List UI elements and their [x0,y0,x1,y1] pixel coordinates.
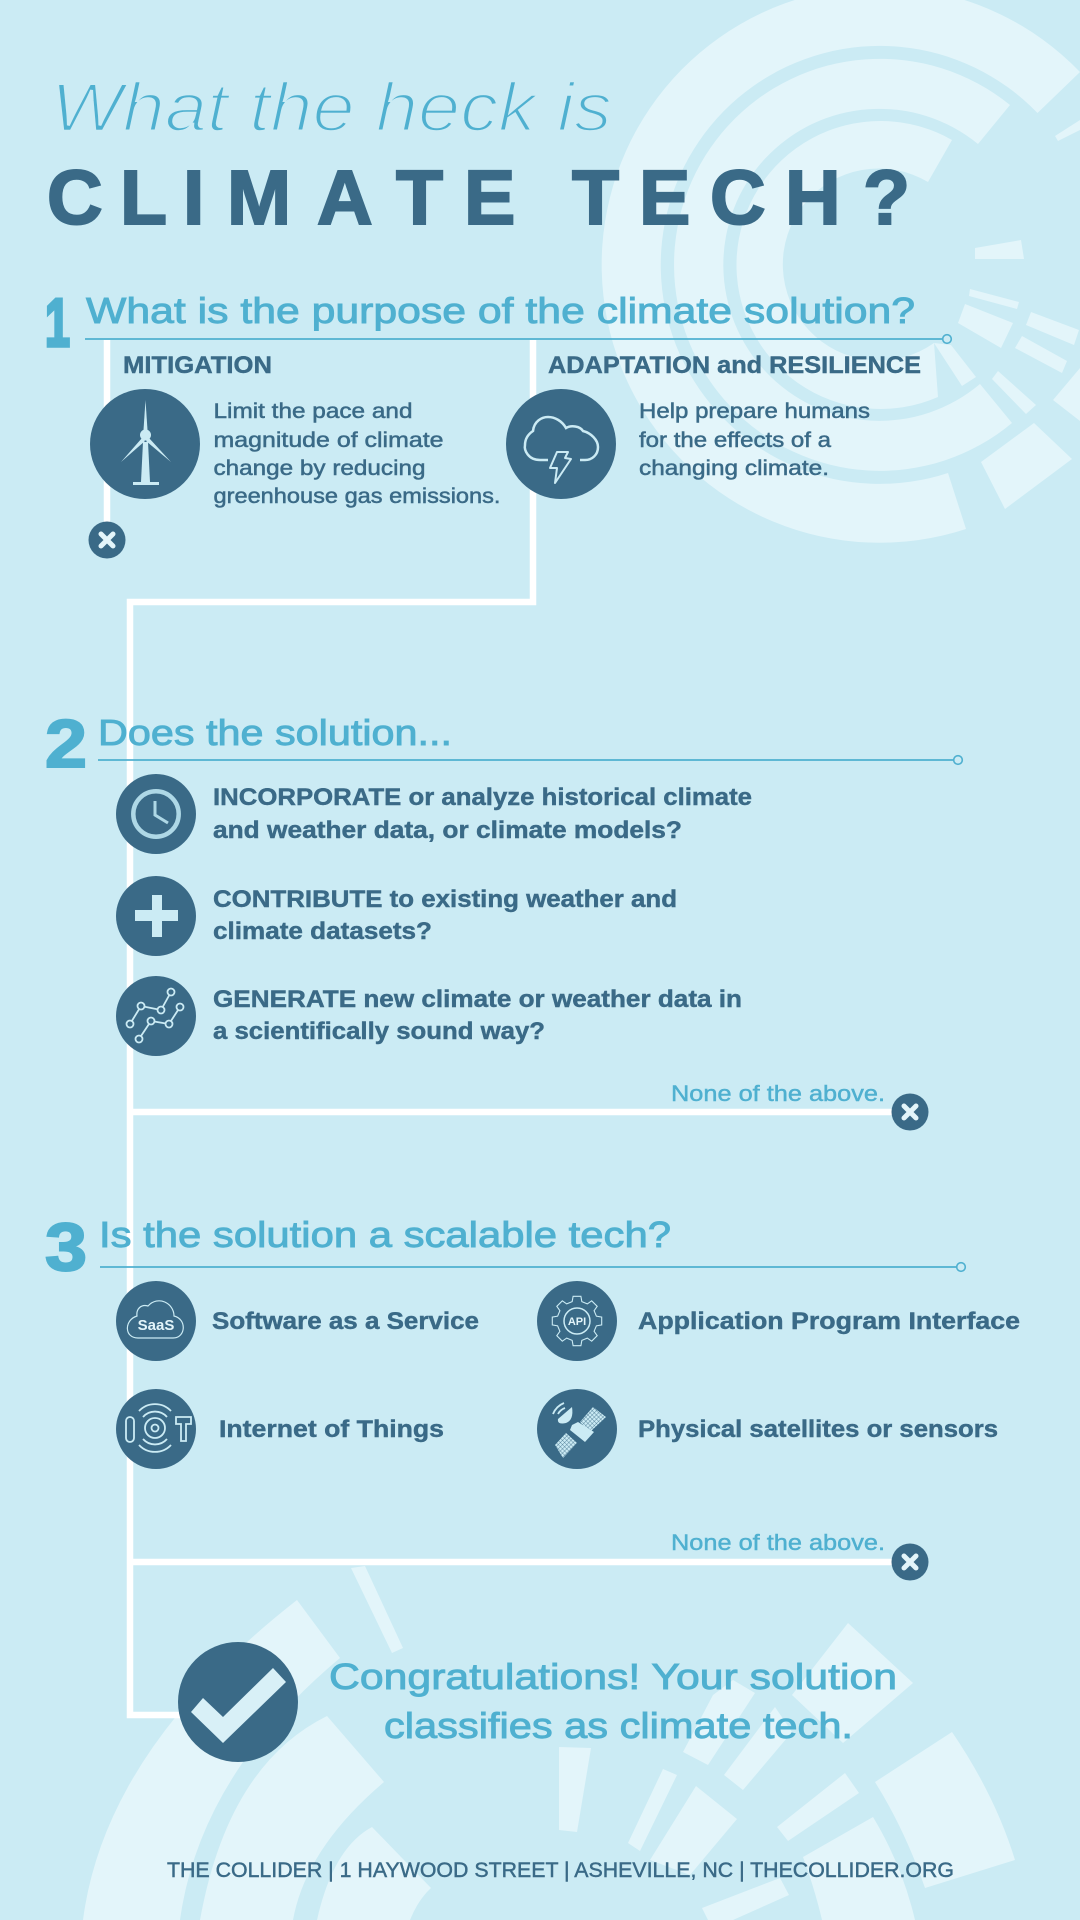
mitigation label: MITIGATION [123,352,272,379]
congratulations text [329,1656,897,1746]
icon: API gear [537,1281,617,1361]
physical satellites label: Physical satellites or sensors [638,1416,998,1443]
mitigation description: Limit the pace and [214,399,412,423]
title line one: What the heck is [51,69,612,146]
mitigation description: greenhouse gas emissions. [214,484,500,508]
mitigation description [214,399,500,508]
flow connector lines [107,340,900,1715]
congratulations text: classifies as climate tech. [384,1705,853,1746]
icon: x stop [88,522,126,558]
number 3: 3 [45,1209,87,1285]
heading 1 rule [85,335,951,343]
congratulations text: Congratulations! Your solution [329,1656,897,1697]
contribute text: climate datasets? [213,918,432,945]
icon: plus [116,876,196,956]
icon: clock [116,774,196,854]
icon: wind turbine [90,389,200,499]
conclusion [178,1642,897,1762]
adaptation description: Help prepare humans [639,399,870,423]
heading 2: Does the solution... [98,712,452,753]
icon: x stop [892,1544,928,1580]
heading 3: Is the solution a scalable tech? [99,1214,671,1255]
number 2: 2 [45,706,87,782]
generate text: GENERATE new climate or weather data in [213,986,742,1013]
section 1 [45,285,951,558]
icon: storm cloud [506,389,616,499]
application program interface label: Application Program Interface [638,1308,1020,1335]
mitigation panel [88,352,500,558]
section 3 [45,1209,1020,1580]
background: top right concentric rings [602,0,1080,543]
icon: check mark [178,1642,298,1762]
adaptation label: ADAPTATION and RESILIENCE [548,352,921,379]
incorporate text: and weather data, or climate models? [213,817,682,844]
generate text [213,986,742,1045]
mitigation description: magnitude of climate [214,428,444,452]
icon: data graph [116,976,196,1056]
background: bottom concentric rings [83,1566,1015,1920]
icon: SaaS cloud [116,1281,196,1361]
number 1: 1 [45,285,70,361]
adaptation description: changing climate. [639,456,829,480]
title line two: CLIMATE TECH? [47,155,910,241]
icon: x stop [892,1094,928,1130]
generate text: a scientifically sound way? [213,1018,545,1045]
software as a service label: Software as a Service [212,1308,479,1335]
footer: THE COLLIDER | 1 HAYWOOD STREET | ASHEVILLE, NC | THECOLLIDER.ORG [167,1859,954,1882]
none of the above label: None of the above. [671,1530,885,1555]
section 2 [45,706,962,1130]
contribute text [213,886,677,945]
adaptation panel [506,352,921,499]
heading 1: What is the purpose of the climate solution? [86,290,915,331]
icon: API gear: API [568,1316,586,1328]
incorporate text [213,784,752,844]
internet of things label: Internet of Things [219,1416,444,1443]
icon: SaaS cloud: SaaS [138,1317,174,1334]
none of the above label: None of the above. [671,1081,885,1106]
contribute text: CONTRIBUTE to existing weather and [213,886,677,913]
incorporate text: INCORPORATE or analyze historical climate [213,784,752,811]
adaptation description: for the effects of a [639,428,831,452]
heading 2 rule [98,756,962,764]
heading 3 rule [100,1263,965,1271]
mitigation description: change by reducing [214,456,426,480]
icon: internet of things [116,1389,196,1469]
adaptation description [639,399,870,480]
icon: satellite [537,1389,617,1469]
title [47,69,910,241]
